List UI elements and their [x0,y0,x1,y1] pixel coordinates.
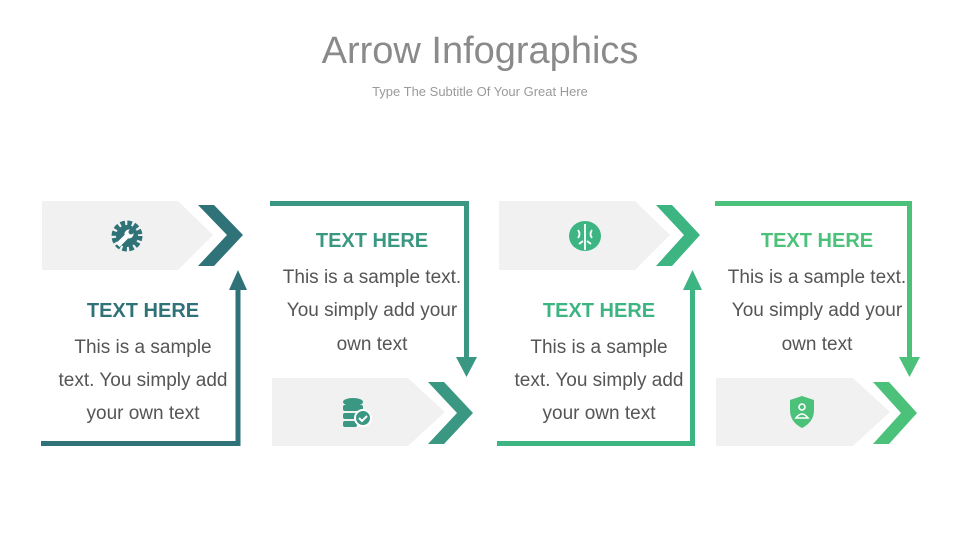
heading 3: TEXT HERE [543,300,655,322]
title: Arrow Infographics [322,30,638,72]
body 2: This is a sample text. [283,267,461,288]
chevron 4 [873,382,917,444]
panel: step 4: You simply add your [732,300,903,321]
gray arrow box 3 [499,201,670,270]
connector line 4 with down arrow [715,204,910,360]
panel: step 3 [497,201,702,444]
connector line 1 with up arrow [41,285,238,444]
icon: brain [569,221,601,251]
gray arrow box 1 [42,201,213,270]
panel: step 1: text. You simply add [58,370,228,391]
icon: database check [343,398,371,427]
panel: step 1: your own text [86,403,200,424]
heading 4: TEXT HERE [761,230,873,252]
panel: step 1 [41,201,247,444]
connector line 3 with up arrow [497,285,692,444]
panel: step 4: own text [782,334,853,355]
connector line 2 with down arrow [270,204,466,360]
chevron 1 [198,205,243,266]
icon: shield user [790,396,814,428]
panel: step 2: own text [337,334,408,355]
chevron 2 [428,382,473,444]
heading 2: TEXT HERE [316,230,428,252]
chevron 3 [656,205,700,266]
panel: step 2: You simply add your [287,300,458,321]
icon: gear wrench [114,223,140,249]
subtitle: Type The Subtitle Of Your Great Here [372,84,588,99]
panel: step 3: your own text [542,403,656,424]
panel: step 4 [715,204,920,446]
heading 1: TEXT HERE [87,300,199,322]
panel: step 2 [270,204,477,446]
panel: step 3: text. You simply add [514,370,684,391]
body 3: This is a sample [530,337,668,358]
gray arrow box 4 [716,378,890,446]
gray arrow box 2 [272,378,445,446]
body 4: This is a sample text. [728,267,906,288]
body 1: This is a sample [74,337,212,358]
